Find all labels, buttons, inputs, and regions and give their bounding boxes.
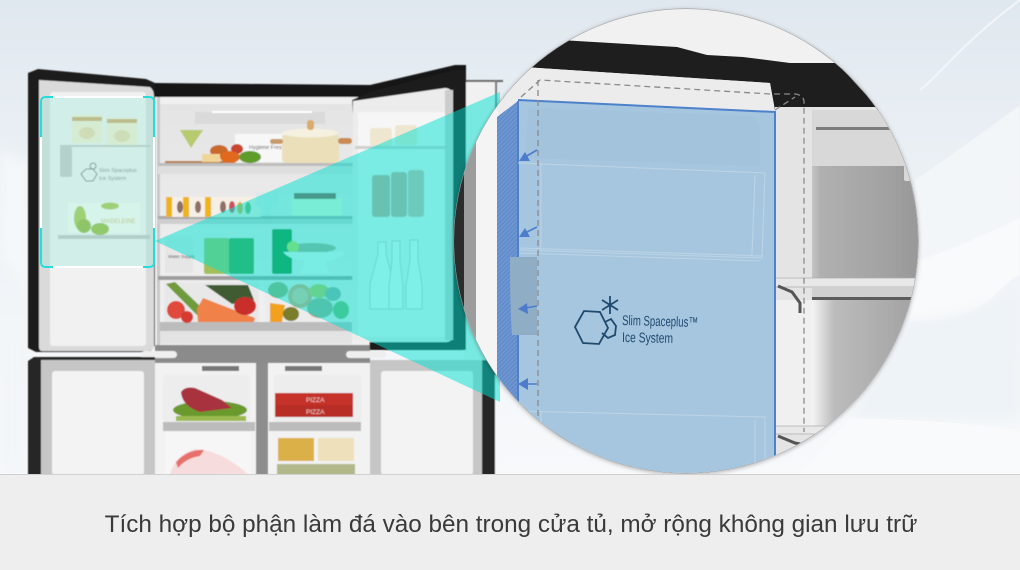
pizza boxes: PIZZA bbox=[306, 409, 325, 416]
door top bin products bbox=[60, 115, 150, 147]
door jars bbox=[370, 128, 392, 146]
refrigerator bbox=[28, 65, 503, 475]
hygiene fresh panel bbox=[235, 134, 290, 162]
madeleine box: MADELEINE bbox=[101, 219, 136, 225]
lower section bbox=[28, 350, 495, 475]
door inner shading bbox=[525, 108, 760, 166]
left interior strip bbox=[454, 105, 523, 406]
water supply box: Water Supply bbox=[168, 254, 196, 259]
teal projection beam bbox=[155, 92, 500, 402]
soda bottles bbox=[372, 170, 424, 217]
main cavity bbox=[155, 97, 370, 350]
far side body of fridge bbox=[464, 80, 503, 475]
main cavity: Hygiene Fresh bbox=[249, 145, 285, 151]
crisper drawer faces bbox=[160, 322, 352, 331]
lower left door bbox=[28, 357, 155, 475]
cake bbox=[292, 193, 342, 216]
logo text: Ice System bbox=[622, 329, 673, 346]
logo text: Slim Spaceplus™ bbox=[622, 312, 698, 330]
blue door panel bbox=[518, 100, 775, 480]
ice hexagons icon bbox=[575, 296, 618, 344]
hinges bbox=[141, 351, 177, 358]
pizza boxes: PIZZA bbox=[306, 397, 325, 404]
caption text: Tích hợp bộ phận làm đá vào bên trong cửa tủ, mở rộng không gian lưu trữ bbox=[105, 511, 917, 538]
right crisper fruits bbox=[265, 282, 351, 322]
drink jars bbox=[204, 229, 292, 274]
fish on cake stand bbox=[283, 241, 345, 274]
white door top edge bbox=[496, 68, 774, 107]
arrows bbox=[518, 150, 537, 390]
magnified circle bbox=[450, 5, 925, 480]
plate of food bbox=[165, 144, 261, 163]
door logo label: Slim Spaceplus bbox=[99, 168, 137, 174]
door outline bbox=[518, 100, 775, 458]
freezer left column bbox=[155, 363, 256, 475]
frozen food containers bbox=[277, 438, 355, 475]
blue hatched door insulation bbox=[497, 101, 518, 412]
upper left door bbox=[28, 69, 155, 352]
macaron boxes bbox=[166, 197, 261, 217]
glass shelves bbox=[158, 163, 354, 166]
top black cabinet rim bbox=[155, 65, 466, 100]
caption band bbox=[0, 474, 1020, 570]
pizza boxes bbox=[275, 393, 353, 417]
logo text bbox=[622, 315, 698, 346]
divider column bbox=[256, 362, 268, 475]
water supply box bbox=[165, 236, 196, 273]
freezer right column bbox=[268, 363, 370, 475]
door logo bbox=[81, 163, 97, 181]
black top of door bbox=[523, 40, 880, 110]
highlighted door area bbox=[41, 97, 154, 267]
door handle recess bbox=[60, 147, 72, 177]
pot bbox=[270, 120, 352, 163]
right steel interior bbox=[775, 107, 918, 456]
lower right door bbox=[370, 360, 495, 475]
handle recess bbox=[510, 257, 537, 335]
glass bottles bbox=[370, 240, 422, 309]
madeleine box bbox=[58, 202, 150, 239]
upper right open door bbox=[352, 70, 466, 350]
upper left door: Ice System bbox=[99, 176, 127, 182]
glass on shelf bbox=[256, 192, 278, 216]
fish bbox=[170, 449, 248, 475]
left crisper vegetables bbox=[164, 282, 259, 323]
Slim Spaceplus logo bbox=[575, 296, 698, 346]
lower door bin bbox=[528, 410, 766, 462]
meat on greens bbox=[173, 388, 247, 421]
martini glass bbox=[180, 130, 203, 148]
dashed hidden outline bbox=[521, 80, 804, 432]
top door bin bbox=[518, 163, 765, 261]
